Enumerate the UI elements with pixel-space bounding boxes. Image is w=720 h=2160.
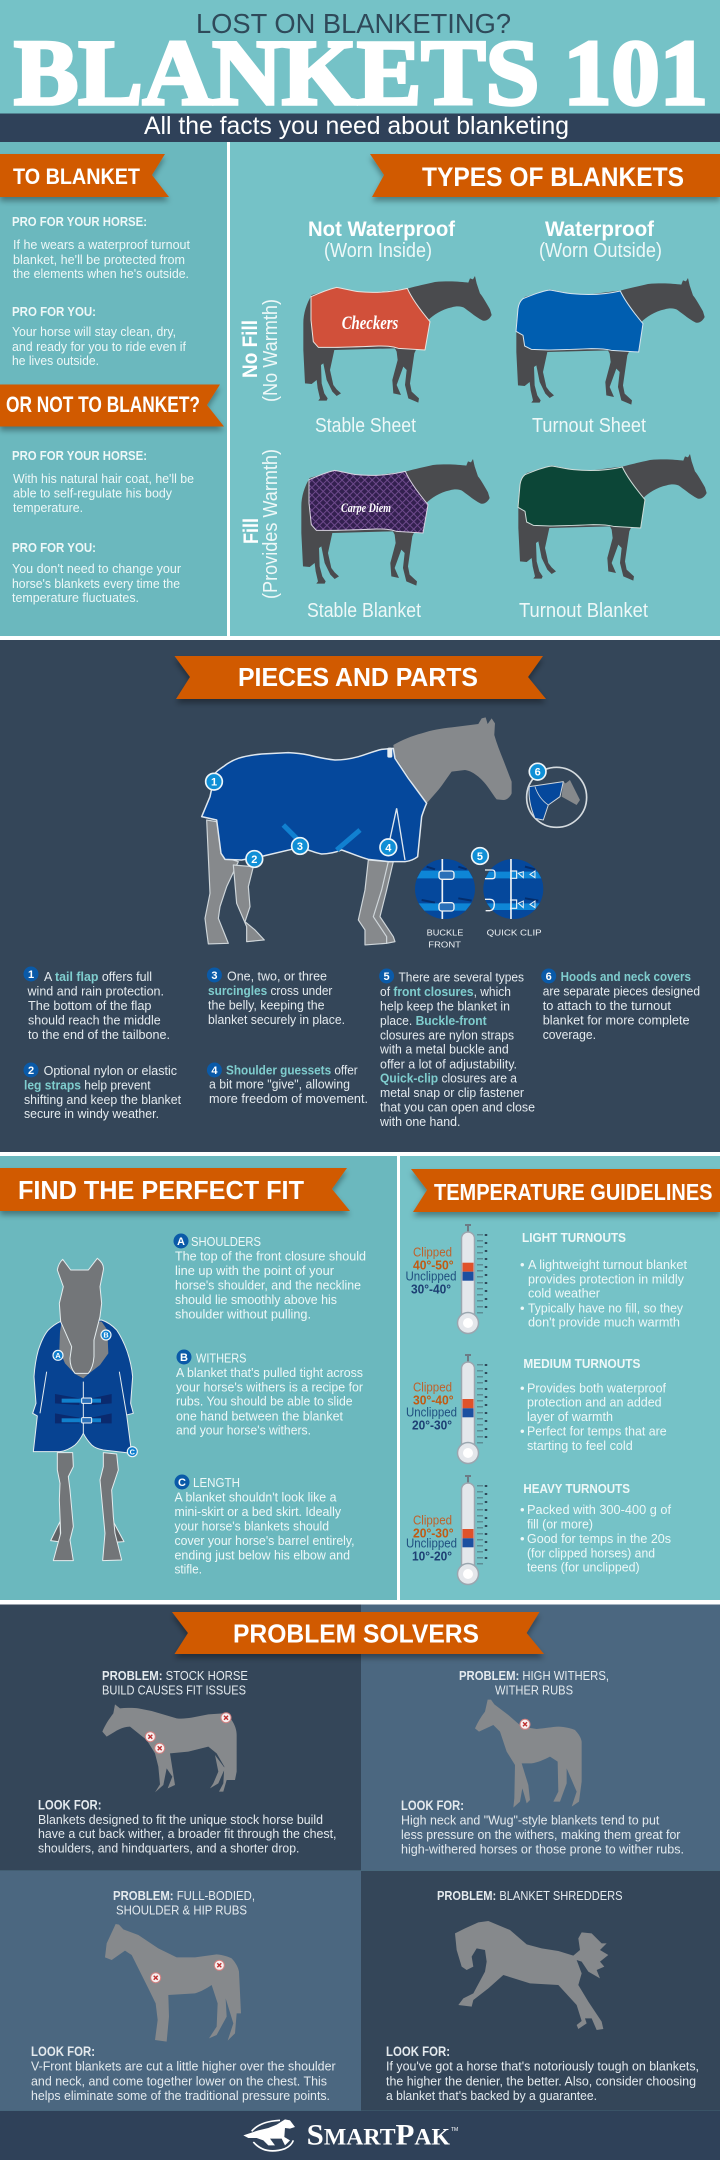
surcingles bbox=[283, 825, 360, 850]
text: note 2 leg straps: shifting and keep the blanket bbox=[24, 1092, 181, 1107]
text: note 5 front closures: with a metal buckle and bbox=[379, 1042, 509, 1057]
marker 5: 5 bbox=[477, 851, 483, 863]
look for text: and neck, and come together lower on the chest. This bbox=[31, 2073, 327, 2088]
look for text bbox=[401, 1798, 684, 1856]
text: medium turnouts bbox=[520, 1356, 667, 1453]
banner: problem solvers: PROBLEM SOLVERS bbox=[233, 1619, 479, 1649]
text: note 1 tail flap: wind and rain protection. bbox=[27, 984, 164, 999]
column heading: waterproof: (Worn Outside) bbox=[539, 240, 662, 262]
subtitle bar bbox=[0, 112, 720, 142]
text block: pro for your horse, no blanket: temperature. bbox=[13, 500, 83, 515]
marker A: A bbox=[55, 1351, 61, 1360]
thermometer: heavy turnouts: Unclipped bbox=[406, 1536, 457, 1551]
marker B bbox=[101, 1330, 111, 1340]
horse: turnout blanket bbox=[518, 454, 707, 581]
panel: header bbox=[0, 0, 720, 143]
front closure straps bbox=[55, 1394, 112, 1423]
marker 1 bbox=[206, 773, 222, 790]
marker 3: 3 bbox=[297, 841, 303, 853]
look for text: the higher the denier, the better. Also, consider choosing bbox=[386, 2073, 696, 2088]
look for text: High neck and "Wug"-style blankets tend to put bbox=[401, 1812, 660, 1828]
thermometer: heavy turnouts: Clipped bbox=[413, 1513, 452, 1528]
row label: fill: Fill bbox=[240, 518, 263, 544]
panel: problem solvers bbox=[0, 1604, 720, 2111]
text: length: stifle. bbox=[174, 1562, 202, 1577]
text block: pro for you, no blanket: PRO FOR YOU: bbox=[12, 540, 96, 555]
look for text: LOOK FOR: bbox=[386, 2044, 450, 2059]
text: note 6 hoods: 6 bbox=[546, 971, 552, 983]
text block: pro for your horse, no blanket: PRO FOR YOUR HORSE: bbox=[12, 448, 147, 463]
text: note 5 front closures: Quick-clip closures are a bbox=[380, 1071, 518, 1086]
text block: pro for your horse bbox=[12, 214, 190, 281]
text: note 2 leg straps: leg straps help prevent bbox=[24, 1077, 151, 1092]
text: withers: A blanket that's pulled tight across bbox=[176, 1365, 363, 1380]
horse: stable blanket bbox=[301, 459, 490, 586]
text: medium turnouts: • bbox=[520, 1380, 525, 1395]
panel: to blanket or not bbox=[0, 142, 227, 636]
text block: pro for you, no blanket: horse's blankets every time the bbox=[12, 576, 180, 591]
look for text: high-withered horses or those prone to wither rubs. bbox=[401, 1841, 684, 1856]
panel: find the perfect fit bbox=[0, 1156, 397, 1600]
horse: turnout sheet bbox=[516, 278, 705, 405]
text: note 5 front closures: that you can open and close bbox=[380, 1099, 535, 1114]
marker B: B bbox=[103, 1331, 109, 1340]
text: light turnouts: A lightweight turnout blanket bbox=[528, 1257, 687, 1272]
panel: pieces and parts bbox=[0, 640, 720, 1152]
text: withers: rubs. You should be able to slide bbox=[176, 1394, 353, 1409]
diagram: blanketed horse bbox=[202, 717, 587, 950]
text: withers: one hand between the blanket bbox=[176, 1408, 343, 1423]
banner: find the perfect fit: FIND THE PERFECT FIT bbox=[18, 1175, 304, 1205]
problem heading bbox=[113, 1888, 255, 1917]
horse head bbox=[57, 1258, 103, 1373]
banner: temperature guidelines bbox=[411, 1169, 720, 1212]
text: shoulders: line up with the point of your bbox=[175, 1263, 335, 1278]
inset: hood bbox=[527, 763, 587, 827]
kicker heading: LOST ON BLANKETING? bbox=[196, 8, 511, 39]
text: note 4 shoulder guessets: Shoulder guessets offer bbox=[226, 1062, 358, 1077]
text: note 1 tail flap: 1 bbox=[28, 969, 34, 981]
text: medium turnouts: Provides both waterproof bbox=[527, 1380, 666, 1395]
problem heading bbox=[459, 1668, 609, 1697]
text: heavy turnouts: Good for temps in the 20s bbox=[527, 1531, 671, 1546]
text: note 5 front closures: closures are nylon straps bbox=[380, 1027, 514, 1042]
text: shoulders: should lie smoothly above his bbox=[175, 1292, 337, 1307]
quadrant: full-bodied bbox=[0, 1871, 361, 2111]
column heading: not waterproof bbox=[308, 218, 456, 262]
thermometer: light turnouts: 40°-50° bbox=[413, 1257, 454, 1272]
thermometer: heavy turnouts: 20°-30° bbox=[413, 1525, 454, 1540]
text: light turnouts: provides protection in mildly bbox=[528, 1271, 684, 1286]
text: note 3 surcingles: surcingles cross under bbox=[208, 983, 333, 998]
look for text: have a cut back wither, a broader fit through the chest, bbox=[38, 1826, 336, 1841]
thermometer: medium turnouts: Unclipped bbox=[406, 1405, 457, 1420]
text: note 2 leg straps: Optional nylon or elastic bbox=[44, 1063, 177, 1078]
label: turnout blanket: Turnout Blanket bbox=[519, 600, 648, 622]
problem heading: SHOULDER & HIP RUBS bbox=[116, 1902, 247, 1917]
look for text: V-Front blankets are cut a little higher over the shoulder bbox=[31, 2059, 336, 2074]
text: medium turnouts: MEDIUM TURNOUTS bbox=[523, 1356, 641, 1371]
look for text: Blankets designed to fit the unique stock horse build bbox=[38, 1812, 323, 1827]
text: length: ending just below his elbow and bbox=[174, 1547, 350, 1562]
horse legs bbox=[205, 820, 395, 945]
text: withers bbox=[176, 1350, 364, 1438]
banner: pieces and parts: PIECES AND PARTS bbox=[238, 662, 478, 692]
text: note 2 leg straps: 2 bbox=[28, 1065, 34, 1077]
label: stable sheet: Stable Sheet bbox=[315, 415, 416, 437]
marker 2 bbox=[246, 851, 263, 867]
horse: stable sheet bbox=[303, 276, 492, 403]
marker A bbox=[53, 1350, 63, 1360]
look for text: helps eliminate some of the traditional pressure points. bbox=[31, 2088, 330, 2103]
marker 1: 1 bbox=[211, 777, 217, 789]
footer: smartpak logo bbox=[0, 2111, 720, 2160]
look for text bbox=[386, 2044, 699, 2103]
text: shoulders: The top of the front closure should bbox=[175, 1249, 366, 1264]
row label: fill: (Provides Warmth) bbox=[260, 449, 282, 599]
text: note 4 shoulder guessets: a bit more "give", allowing bbox=[209, 1077, 350, 1092]
logo wordmark: SMARTPAK bbox=[307, 2118, 450, 2151]
text: length: cover your horse's barrel entirely, bbox=[174, 1533, 354, 1548]
text: note 3 surcingles: the belly, keeping the bbox=[208, 998, 325, 1013]
text block: pro for you: PRO FOR YOU: bbox=[12, 304, 96, 319]
thermometer: light turnouts: Unclipped bbox=[406, 1269, 456, 1284]
thermometer: medium turnouts bbox=[406, 1354, 486, 1464]
text: length: C bbox=[178, 1477, 186, 1489]
text: note 6 hoods: Hoods and neck covers bbox=[561, 969, 691, 984]
text: withers: B bbox=[180, 1352, 188, 1364]
thermometer: medium turnouts: 20°-30° bbox=[412, 1417, 452, 1432]
text: heavy turnouts: teens (for unclipped) bbox=[527, 1560, 640, 1575]
logo mark bbox=[243, 2119, 295, 2151]
horse silhouette with rub point bbox=[475, 1700, 582, 1808]
look for text: less pressure on the withers, making them great for bbox=[401, 1827, 681, 1842]
text: medium turnouts: Perfect for temps that are bbox=[527, 1424, 667, 1439]
text: note 3 surcingles: 3 bbox=[211, 970, 217, 982]
text: note 1 tail flap bbox=[24, 966, 170, 1042]
marker C bbox=[127, 1447, 137, 1457]
text block: pro for your horse, no blanket bbox=[12, 448, 194, 515]
text: note 1 tail flap: A tail flap offers full bbox=[44, 969, 152, 984]
inset: hood: 6 bbox=[535, 767, 541, 779]
marker C: C bbox=[130, 1447, 136, 1456]
text: medium turnouts: protection and an added bbox=[527, 1395, 662, 1410]
inset: buckle front bbox=[415, 859, 475, 950]
text: note 3 surcingles: One, two, or three bbox=[227, 969, 327, 984]
neck bbox=[59, 1322, 108, 1378]
bucking horse silhouette bbox=[455, 1921, 608, 2030]
text: note 5 front closures: There are several types bbox=[398, 970, 524, 985]
look for text: a blanket that's backed by a guarantee. bbox=[386, 2088, 597, 2103]
text: note 6 hoods: coverage. bbox=[543, 1027, 596, 1042]
text: heavy turnouts: • bbox=[520, 1502, 525, 1517]
blanket bbox=[33, 1320, 133, 1453]
text: length: LENGTH bbox=[193, 1475, 240, 1490]
inset: buckle front: FRONT bbox=[428, 941, 461, 950]
text: shoulders: shoulder without pulling. bbox=[175, 1306, 311, 1321]
text: light turnouts: • bbox=[520, 1300, 525, 1315]
column heading: not waterproof: Not Waterproof bbox=[308, 218, 456, 241]
row label: no fill: No Fill bbox=[239, 320, 262, 378]
problem heading: BUILD CAUSES FIT ISSUES bbox=[102, 1682, 246, 1697]
text: shoulders: SHOULDERS bbox=[191, 1234, 261, 1249]
problem heading bbox=[102, 1668, 248, 1697]
look for text: LOOK FOR: bbox=[401, 1798, 464, 1813]
text: note 1 tail flap: The bottom of the flap bbox=[28, 998, 152, 1013]
text: note 4 shoulder guessets: more freedom of movement. bbox=[209, 1091, 368, 1106]
text: light turnouts: Typically have no fill, so they bbox=[528, 1300, 683, 1315]
text: medium turnouts: starting to feel cold bbox=[527, 1438, 633, 1453]
text: note 6 hoods: blanket for more complete bbox=[543, 1012, 690, 1027]
text: note 6 hoods: to attach to the turnout bbox=[543, 998, 671, 1013]
text: length: your horse's blankets should bbox=[174, 1518, 329, 1533]
banner: pieces and parts bbox=[174, 656, 546, 699]
text block: pro for you bbox=[12, 304, 186, 368]
quadrant: blanket shredders bbox=[361, 1871, 720, 2111]
problem heading: WITHER RUBS bbox=[495, 1682, 573, 1697]
seams bbox=[40, 1372, 127, 1433]
text: shoulders: A bbox=[177, 1236, 185, 1248]
banner: or not to blanket bbox=[0, 384, 224, 426]
text block: pro for your horse: PRO FOR YOUR HORSE: bbox=[12, 214, 147, 229]
text block: pro for you, no blanket: You don't need to change your bbox=[12, 561, 182, 576]
text: heavy turnouts bbox=[520, 1481, 671, 1575]
marker 4 bbox=[380, 839, 397, 856]
text: note 5 front closures: with one hand. bbox=[379, 1114, 460, 1129]
panel: temperature guidelines bbox=[400, 1156, 720, 1600]
marker 3 bbox=[292, 838, 308, 854]
text: shoulders: horse's shoulder, and the neckline bbox=[175, 1277, 361, 1292]
column heading: not waterproof: (Worn Inside) bbox=[324, 240, 432, 262]
thermometer: heavy turnouts bbox=[406, 1475, 486, 1584]
label: stable blanket: Stable Blanket bbox=[307, 600, 421, 622]
text block: pro for you: and ready for you to ride even if bbox=[12, 339, 186, 354]
text: light turnouts: • bbox=[520, 1257, 525, 1272]
banner: or not to blanket: OR NOT TO BLANKET? bbox=[6, 392, 200, 417]
banner: to blanket bbox=[0, 154, 169, 197]
text: note 4 shoulder guessets bbox=[207, 1062, 368, 1106]
marker 2: 2 bbox=[251, 854, 257, 866]
text: light turnouts: LIGHT TURNOUTS bbox=[522, 1230, 626, 1245]
text: heavy turnouts: • bbox=[520, 1531, 525, 1546]
banner: types of blankets bbox=[370, 154, 720, 197]
horse silhouette with rub points bbox=[105, 1924, 241, 2042]
label: turnout sheet: Turnout Sheet bbox=[532, 415, 646, 437]
diagram: horse front view bbox=[33, 1258, 137, 1561]
quadrant: high withers bbox=[361, 1604, 720, 1871]
problem heading: PROBLEM: BLANKET SHREDDERS bbox=[437, 1888, 623, 1903]
problem heading: PROBLEM: FULL-BODIED, bbox=[113, 1888, 255, 1903]
text block: pro for your horse, no blanket: able to self-regulate his body bbox=[13, 486, 172, 500]
text block: pro for you: he lives outside. bbox=[12, 353, 99, 368]
text: note 5 front closures: help keep the blanket in bbox=[380, 999, 510, 1014]
text: note 6 hoods: are separate pieces designed bbox=[543, 984, 700, 999]
shoulder gusset bbox=[388, 808, 405, 860]
text block: pro for your horse, no blanket: With his natural hair coat, he'll be bbox=[13, 471, 194, 486]
text block: pro for your horse: the elements when he's outside. bbox=[13, 266, 189, 281]
banner: to blanket: TO BLANKET bbox=[13, 164, 140, 189]
text: note 1 tail flap: to the end of the tailbone. bbox=[28, 1027, 170, 1042]
thermometer: light turnouts bbox=[406, 1224, 486, 1334]
text: note 6 hoods bbox=[541, 968, 700, 1042]
inset: buckle front: BUCKLE bbox=[427, 929, 463, 938]
row label: no fill bbox=[239, 299, 282, 402]
horse: stable sheet: Checkers bbox=[342, 313, 398, 334]
text: shoulders bbox=[174, 1234, 366, 1321]
blue blanket bbox=[202, 748, 427, 862]
text block: pro for you: Your horse will stay clean, dry, bbox=[12, 324, 176, 339]
text: note 3 surcingles: blanket securely in place. bbox=[208, 1012, 345, 1027]
trademark: TM bbox=[451, 2127, 458, 2133]
row label: fill bbox=[240, 449, 282, 599]
thermometer: light turnouts: Clipped bbox=[413, 1245, 452, 1260]
text: heavy turnouts: (for clipped horses) and bbox=[527, 1545, 655, 1560]
text: note 3 surcingles bbox=[207, 968, 345, 1027]
thermometer: light turnouts: 30°-40° bbox=[411, 1282, 451, 1297]
text: note 5 front closures: metal snap or clip fastener bbox=[380, 1085, 525, 1100]
banner: problem solvers bbox=[172, 1612, 544, 1654]
text: note 5 front closures: place. Buckle-front bbox=[380, 1013, 487, 1028]
marker 5 bbox=[472, 848, 488, 864]
look for text: LOOK FOR: bbox=[31, 2044, 95, 2059]
text: heavy turnouts: HEAVY TURNOUTS bbox=[523, 1481, 630, 1496]
row label: no fill: (No Warmth) bbox=[260, 299, 282, 402]
quadrant: stock horse bbox=[0, 1604, 361, 1871]
text: withers: WITHERS bbox=[196, 1350, 247, 1365]
text: light turnouts bbox=[520, 1230, 687, 1330]
text: length: A blanket shouldn't look like a bbox=[174, 1490, 337, 1505]
text block: pro for you, no blanket bbox=[12, 540, 182, 605]
text: withers: and your horse's withers. bbox=[176, 1423, 311, 1438]
look for text: LOOK FOR: bbox=[38, 1797, 102, 1812]
text: withers: your horse's withers is a recipe for bbox=[176, 1379, 364, 1394]
text: note 5 front closures bbox=[379, 968, 535, 1129]
thermometer: heavy turnouts: 10°-20° bbox=[412, 1548, 452, 1563]
text block: pro for you, no blanket: temperature fluctuates. bbox=[12, 590, 139, 605]
problem heading: PROBLEM: HIGH WITHERS, bbox=[459, 1668, 609, 1683]
banner: types of blankets: TYPES OF BLANKETS bbox=[422, 162, 684, 192]
column heading: waterproof: Waterproof bbox=[545, 218, 655, 241]
look for text bbox=[38, 1797, 336, 1856]
text: note 2 leg straps bbox=[24, 1062, 181, 1121]
text: light turnouts: cold weather bbox=[528, 1286, 601, 1301]
horse head and neck bbox=[393, 717, 512, 803]
horse silhouette with rub points bbox=[102, 1704, 237, 1792]
text: light turnouts: don't provide much warmth bbox=[528, 1315, 680, 1330]
text block: pro for your horse: blanket, he'll be protected from bbox=[13, 252, 185, 267]
text: length: mini-skirt or a bed skirt. Ideally bbox=[174, 1504, 341, 1519]
horse: stable blanket: Carpe Diem bbox=[341, 500, 391, 515]
banner: find the perfect fit bbox=[0, 1168, 350, 1211]
main title: BLANKETS 101 bbox=[14, 22, 708, 125]
text: note 1 tail flap: should reach the middle bbox=[28, 1012, 161, 1027]
thermometer: medium turnouts: 30°-40° bbox=[413, 1392, 454, 1407]
text: note 5 front closures: of front closures, which bbox=[380, 984, 511, 999]
panel: types of blankets bbox=[230, 142, 720, 636]
horse legs bbox=[53, 1453, 122, 1561]
text: heavy turnouts: fill (or more) bbox=[527, 1516, 593, 1531]
text: medium turnouts: layer of warmth bbox=[527, 1409, 613, 1424]
text: note 5 front closures: offer a lot of adjustability. bbox=[380, 1056, 517, 1071]
thermometer: medium turnouts: Clipped bbox=[413, 1380, 452, 1395]
look for text bbox=[31, 2044, 336, 2103]
problem heading: PROBLEM: STOCK HORSE bbox=[102, 1668, 248, 1683]
text: heavy turnouts: Packed with 300-400 g of bbox=[527, 1502, 671, 1517]
text block: pro for your horse: If he wears a waterproof turnout bbox=[13, 237, 190, 252]
text: note 4 shoulder guessets: 4 bbox=[211, 1065, 218, 1077]
look for text: If you've got a horse that's notoriously tough on blankets, bbox=[386, 2059, 699, 2074]
rear hooves bbox=[51, 1522, 124, 1542]
text: note 5 front closures: 5 bbox=[384, 971, 390, 983]
column heading: waterproof bbox=[539, 218, 662, 262]
text: length bbox=[174, 1474, 354, 1577]
neck strap bbox=[387, 748, 392, 758]
marker 4: 4 bbox=[385, 842, 392, 854]
text: note 2 leg straps: secure in windy weather. bbox=[24, 1106, 159, 1121]
text: medium turnouts: • bbox=[520, 1424, 525, 1439]
look for text: shoulders, and hindquarters, and a shorter drop. bbox=[38, 1840, 299, 1856]
inset: quick clip: QUICK CLIP bbox=[487, 929, 542, 938]
inset: quick clip bbox=[483, 859, 543, 938]
subtitle bar: All the facts you need about blanketing bbox=[144, 112, 569, 140]
